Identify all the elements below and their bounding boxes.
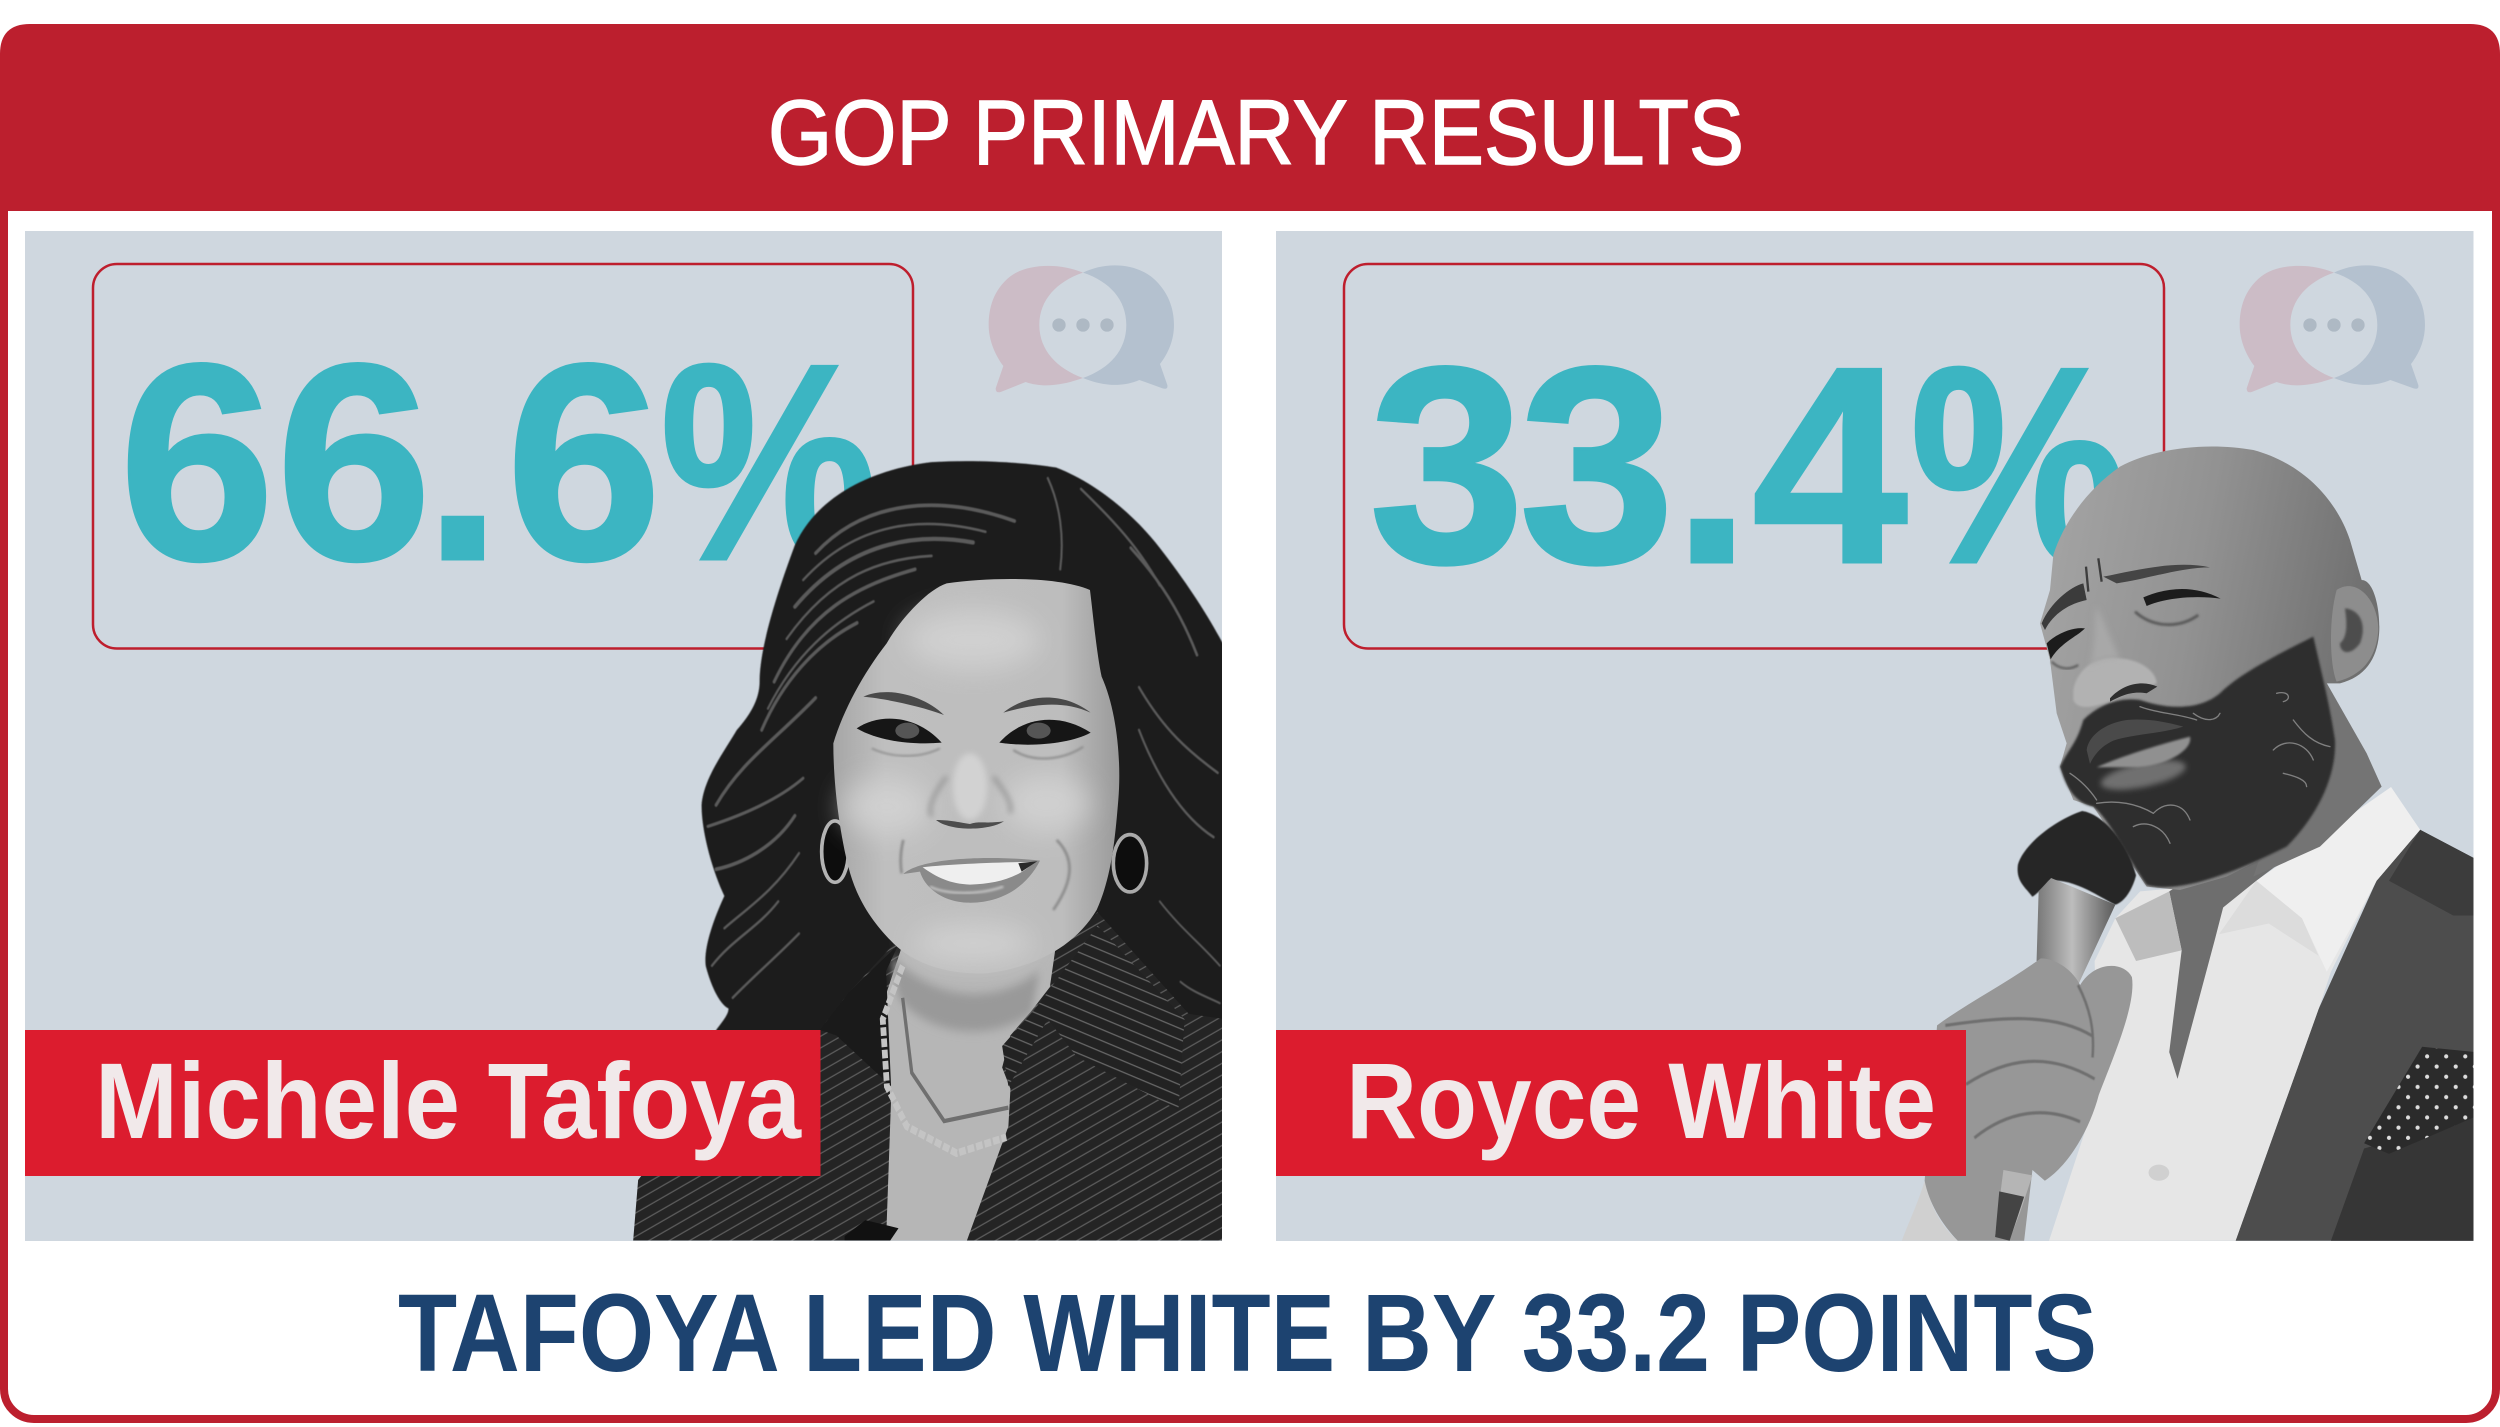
vote share: 66.6%: % — [660, 307, 878, 619]
name bar — [25, 1030, 820, 1176]
title: GOP PRIMARY RESULTS — [768, 82, 1744, 184]
name bar — [1276, 1030, 1966, 1176]
panel: Michele Tafoya — [25, 231, 1226, 1241]
vote share: 66.6%: 66.6 — [119, 307, 662, 619]
name: Michele Tafoya: Michele Tafoya — [95, 1040, 802, 1161]
icon: speech bubbles — [989, 265, 1174, 392]
header band — [0, 24, 2500, 211]
name: Royce White: Royce White — [1346, 1040, 1936, 1161]
vote share: 33.4%: % — [1910, 310, 2128, 622]
icon: speech bubbles — [2240, 265, 2425, 392]
panel: Royce White — [1276, 231, 2476, 1241]
vote share box — [93, 264, 913, 648]
vote share: 33.4%: 33.4 — [1369, 310, 1910, 622]
portrait: Royce White — [1902, 446, 2476, 1241]
vote share box — [1344, 264, 2164, 648]
summary headline: TAFOYA LED WHITE BY 33.2 POINTS — [398, 1272, 2097, 1395]
portrait: Michele Tafoya — [633, 461, 1226, 1241]
